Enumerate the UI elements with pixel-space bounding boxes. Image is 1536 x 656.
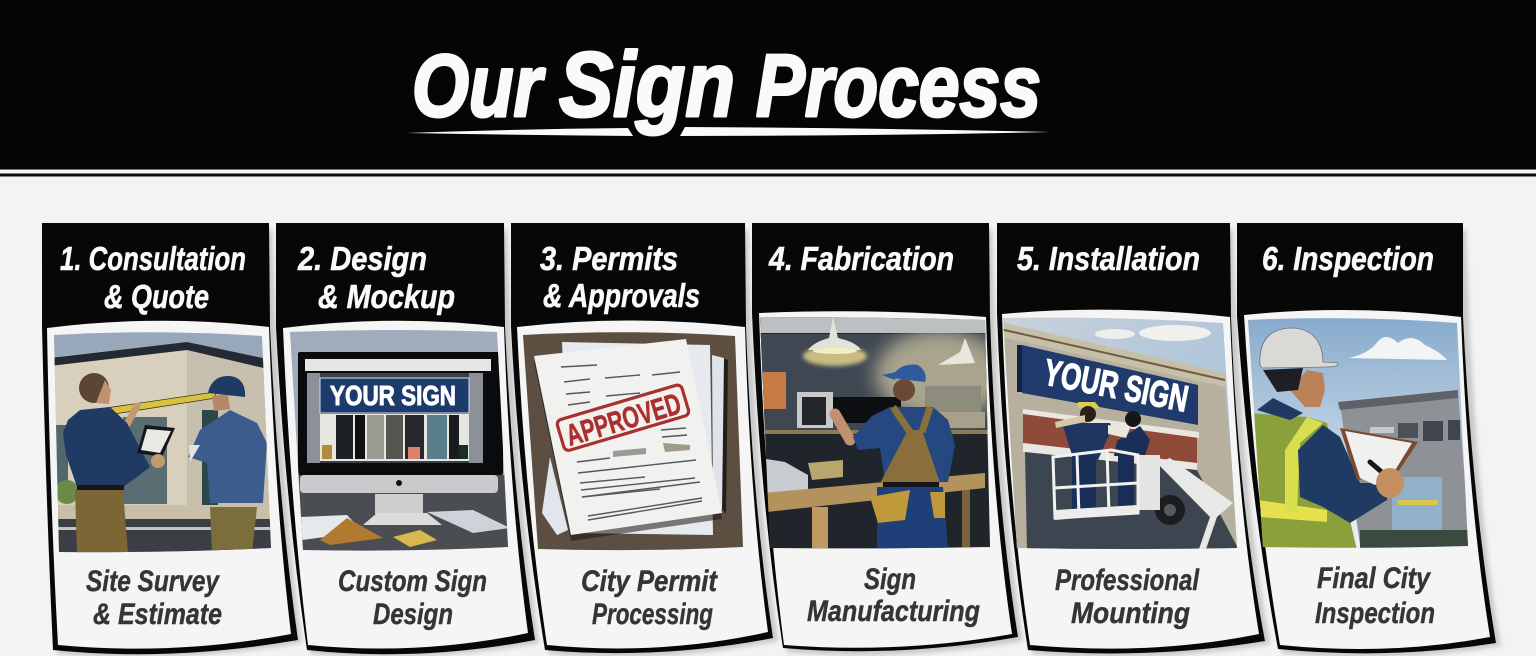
heading: 1. Consultation & Quote — [60, 240, 246, 315]
illustration: site survey — [50, 325, 275, 555]
caption: Sign Manufacturing: Sign — [864, 563, 916, 596]
heading: 3. Permits & Approvals — [540, 240, 700, 314]
caption: City Permit Processing — [581, 565, 719, 631]
caption: City Permit Processing: City Permit — [581, 565, 719, 598]
caption: City Permit Processing: Processing — [592, 598, 713, 631]
illustration: inspector with clipboard — [1244, 315, 1472, 550]
illustration: computer monitor with sign mockup — [285, 325, 515, 555]
caption: Custom Sign Design: Design — [373, 598, 453, 631]
caption: Site Survey & Estimate — [86, 565, 222, 631]
card 5 shadow — [1001, 230, 1270, 656]
title: Sign — [559, 34, 735, 136]
building sign — [1022, 345, 1198, 425]
caption: Professional Mounting: Professional — [1055, 564, 1200, 597]
worker — [835, 365, 955, 549]
caption: Final City Inspection: Inspection — [1315, 597, 1435, 630]
card 3 shadow — [515, 230, 778, 656]
caption: Custom Sign Design — [338, 565, 487, 631]
title — [407, 34, 1050, 136]
hanging lamps — [803, 317, 975, 366]
clipboard — [1340, 427, 1418, 498]
caption: Professional Mounting: Mounting — [1071, 597, 1190, 630]
heading: 2. Design & Mockup — [297, 240, 455, 315]
caption: Professional Mounting — [1055, 564, 1200, 630]
heading: 5. Installation: 5. Installation — [1017, 240, 1200, 277]
heading: 3. Permits & Approvals: & Approvals — [543, 277, 700, 314]
heading: 2. Design & Mockup: 2. Design — [297, 240, 427, 277]
caption: Site Survey & Estimate: Site Survey — [86, 565, 220, 598]
building sign: YOUR SIGN — [1040, 352, 1192, 420]
panel: step 6 inspection — [1237, 223, 1496, 653]
stamp: APPROVED: APPROVED — [562, 388, 685, 453]
panel: step 4 fabrication — [752, 223, 1018, 651]
illustration: sign workshop — [760, 317, 990, 548]
heading: 1. Consultation & Quote: & Quote — [104, 278, 209, 315]
workers — [1055, 402, 1150, 515]
stamp: APPROVED — [556, 384, 691, 454]
lift bucket and boom — [1053, 450, 1233, 552]
caption: Custom Sign Design: Custom Sign — [338, 565, 487, 598]
card 6 shadow — [1241, 230, 1501, 656]
caption: Sign Manufacturing: Manufacturing — [807, 595, 980, 628]
title: Our — [412, 36, 546, 135]
header band — [0, 0, 1536, 176]
card 2 shadow — [280, 230, 539, 656]
card 4 shadow — [756, 230, 1023, 655]
title: Process — [756, 36, 1041, 135]
building — [1338, 390, 1470, 550]
panel: step 3 permits — [511, 223, 773, 653]
panel: step 1 consultation — [42, 223, 298, 654]
caption: Site Survey & Estimate: & Estimate — [93, 598, 222, 631]
caption: Final City Inspection — [1315, 562, 1435, 630]
card 1 shadow — [46, 230, 302, 656]
panel: step 5 installation — [997, 223, 1265, 653]
caption: Sign Manufacturing — [807, 563, 980, 628]
illustration: sign being installed from a lift — [1000, 312, 1240, 552]
caption: Final City Inspection: Final City — [1317, 562, 1431, 595]
heading: 6. Inspection: 6. Inspection — [1262, 240, 1434, 277]
person 2 — [188, 376, 267, 553]
person 1 — [63, 373, 175, 553]
illustration: approved permit documents — [518, 330, 748, 555]
panel: step 2 design — [276, 223, 535, 654]
heading: 2. Design & Mockup: & Mockup — [318, 278, 455, 315]
inspector — [1246, 328, 1388, 550]
tape measure — [106, 392, 216, 415]
heading: 1. Consultation & Quote: 1. Consultation — [60, 240, 246, 277]
mockup sign text: YOUR SIGN — [330, 380, 456, 411]
heading: 3. Permits & Approvals: 3. Permits — [540, 240, 678, 277]
heading: 4. Fabrication: 4. Fabrication — [768, 240, 954, 277]
